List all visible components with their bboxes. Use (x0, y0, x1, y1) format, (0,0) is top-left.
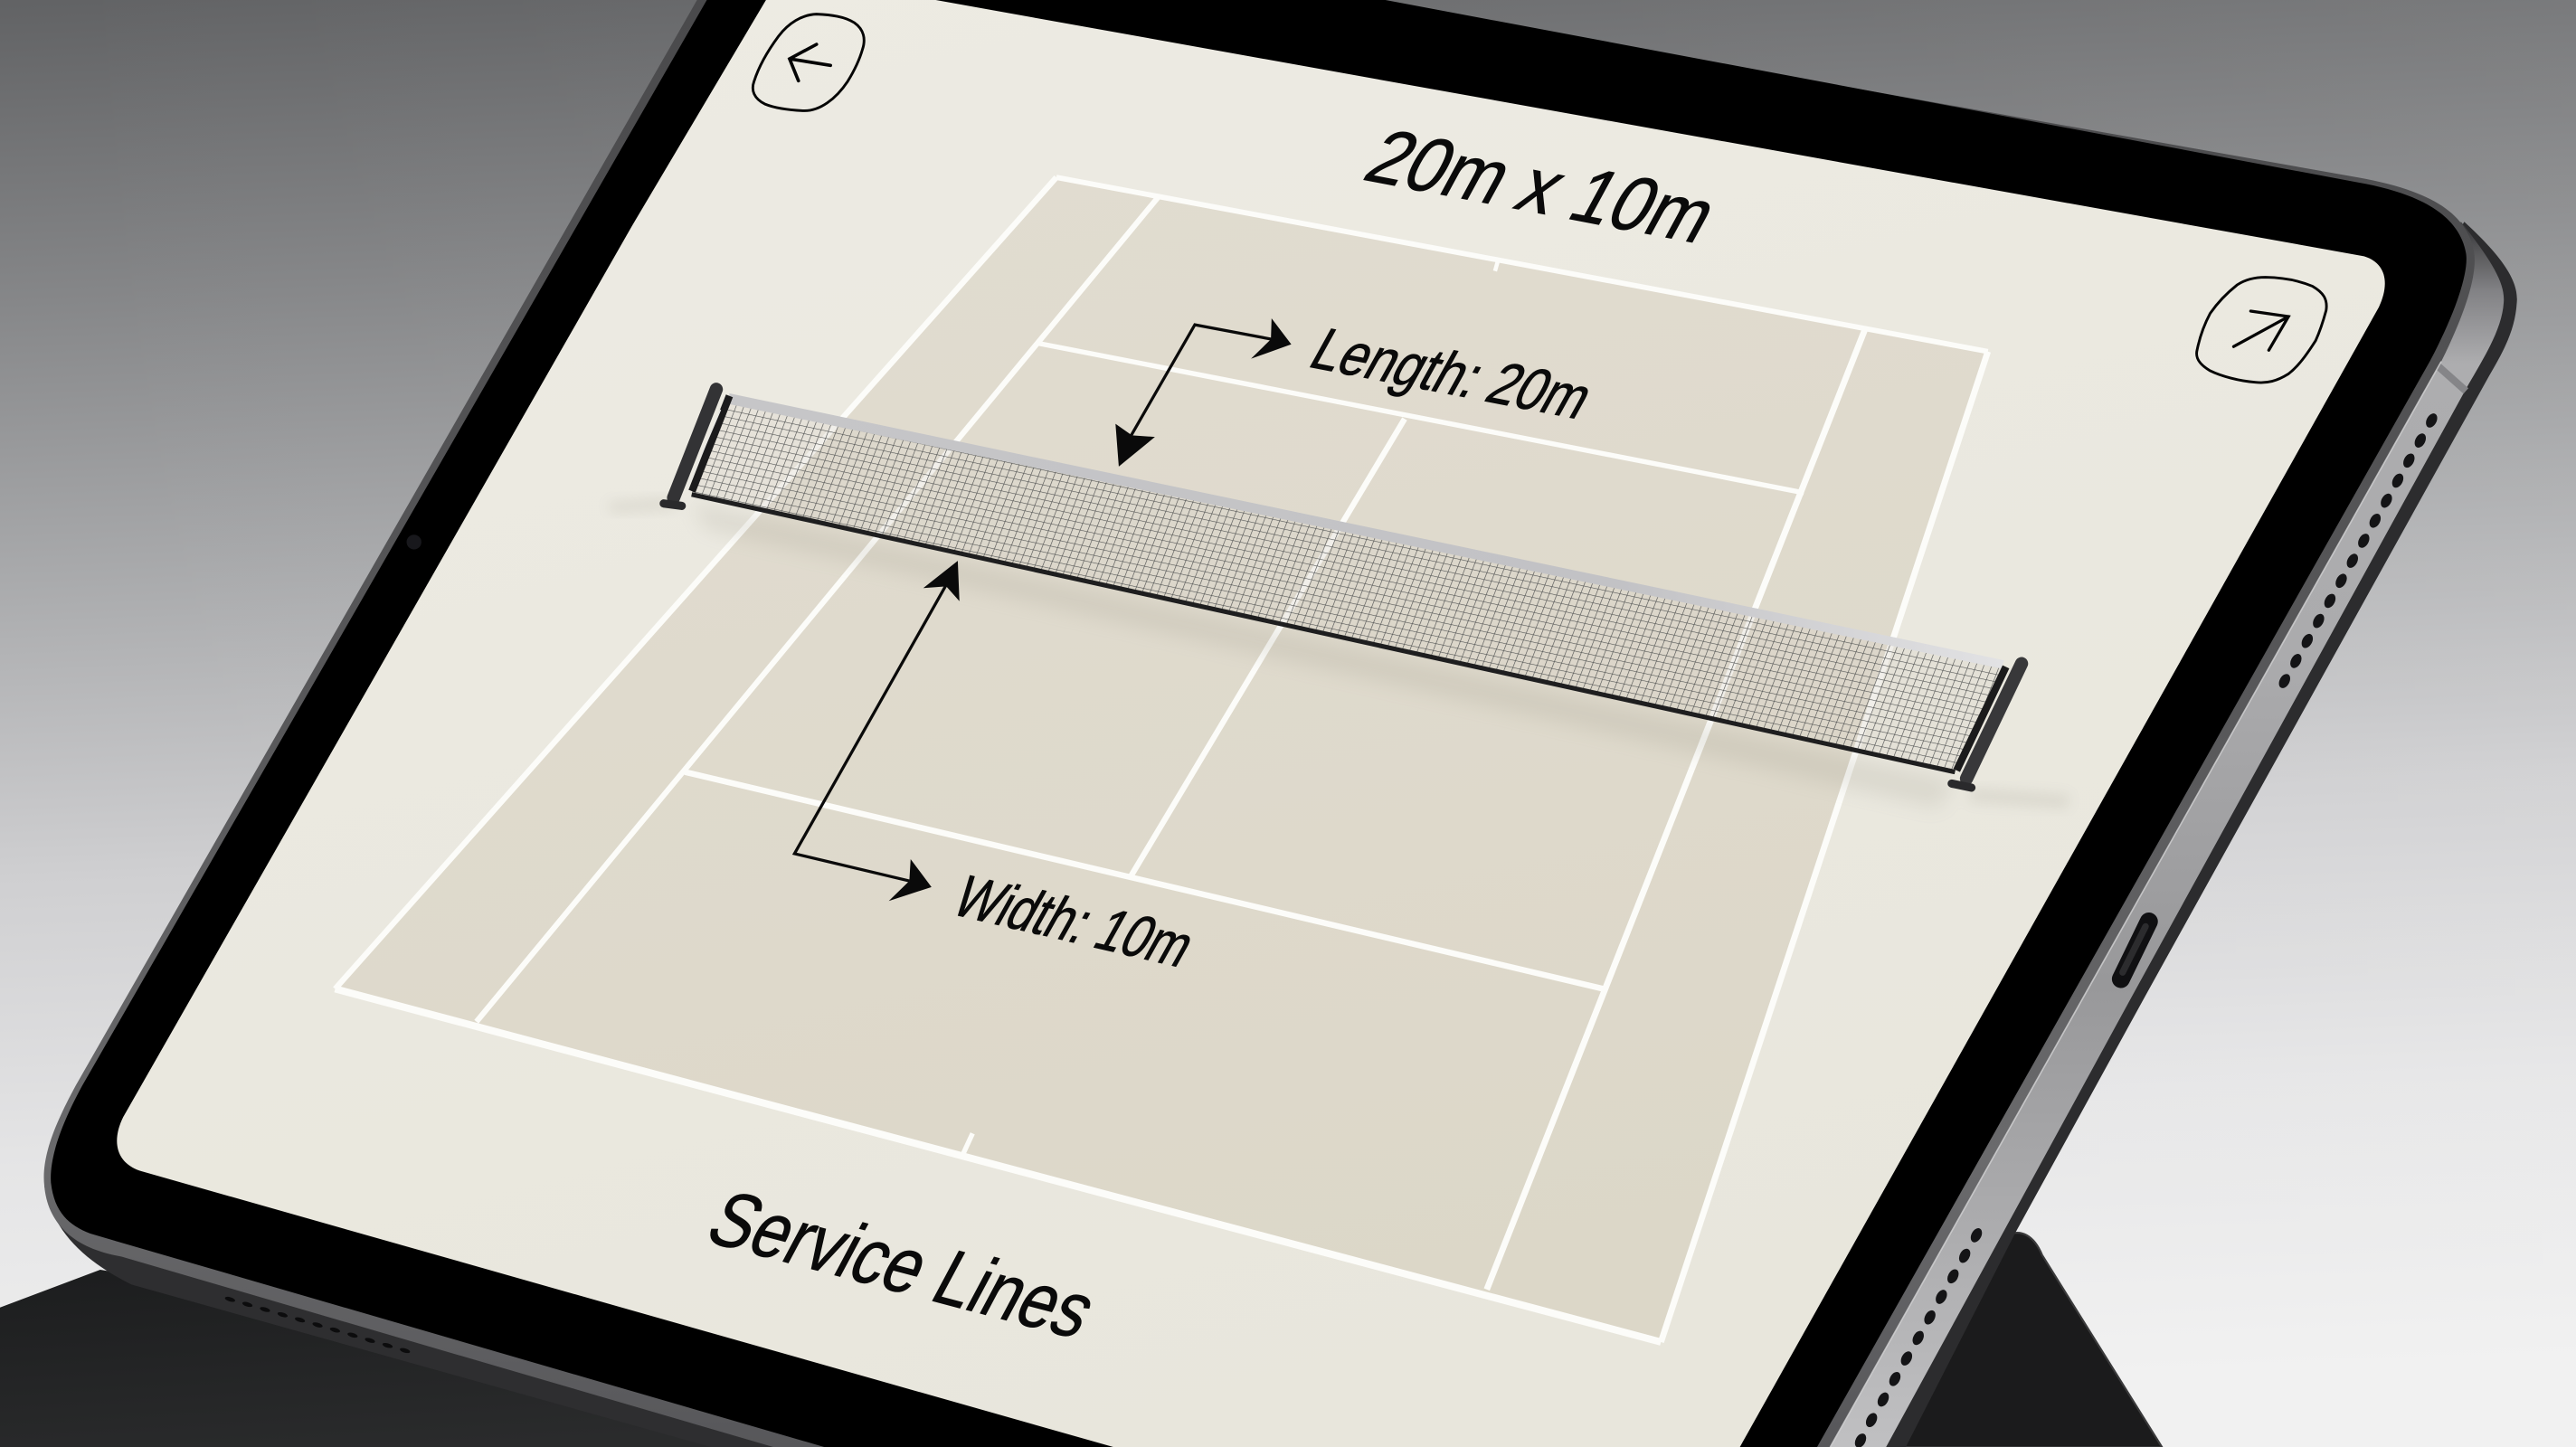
title: dimensions: 20m x 10m (1352, 114, 1732, 259)
width arrow (794, 561, 960, 901)
left post (664, 389, 729, 506)
back button (753, 14, 864, 110)
net body (692, 402, 2003, 771)
front camera (407, 534, 421, 550)
bottom speaker grille (224, 1296, 411, 1354)
forward arrow (2233, 311, 2288, 350)
net top tape (729, 393, 2004, 668)
length arrow (1115, 318, 1292, 467)
court lines (336, 177, 1988, 1342)
speaker holes upper (2277, 411, 2439, 690)
tennis net (664, 389, 2022, 788)
width label: Width: 10m (942, 863, 1208, 979)
speaker holes lower (1852, 1226, 1984, 1447)
length arrow head down (1115, 424, 1155, 467)
tablet side band (1791, 222, 2504, 1447)
forward button outline (2197, 278, 2326, 383)
net bottom tape (692, 495, 1955, 772)
tablet case edge (1791, 222, 2517, 1447)
length label: Length: 20m (1299, 317, 1605, 431)
tablet bottom side (44, 1186, 854, 1447)
width arrow shaft (794, 585, 946, 881)
forward button (2197, 278, 2326, 383)
back button outline (753, 14, 864, 110)
rim highlight (1830, 362, 2441, 1447)
court surface (336, 177, 1988, 1342)
net shadow (608, 497, 2070, 809)
length arrow head right (1251, 318, 1292, 359)
right post (1952, 664, 2022, 788)
width arrow head right (889, 859, 932, 901)
length arrow shaft (1131, 325, 1272, 437)
tennis court (336, 177, 1988, 1342)
back arrow (790, 44, 830, 80)
width arrow head up (923, 561, 960, 601)
usb-c port (2121, 922, 2149, 979)
net mesh (692, 402, 2003, 771)
keyboard base (0, 1270, 1150, 1447)
keyboard stand (1807, 1233, 2162, 1447)
side band seam (2437, 364, 2466, 391)
screen caption: Service Lines (694, 1176, 1111, 1355)
